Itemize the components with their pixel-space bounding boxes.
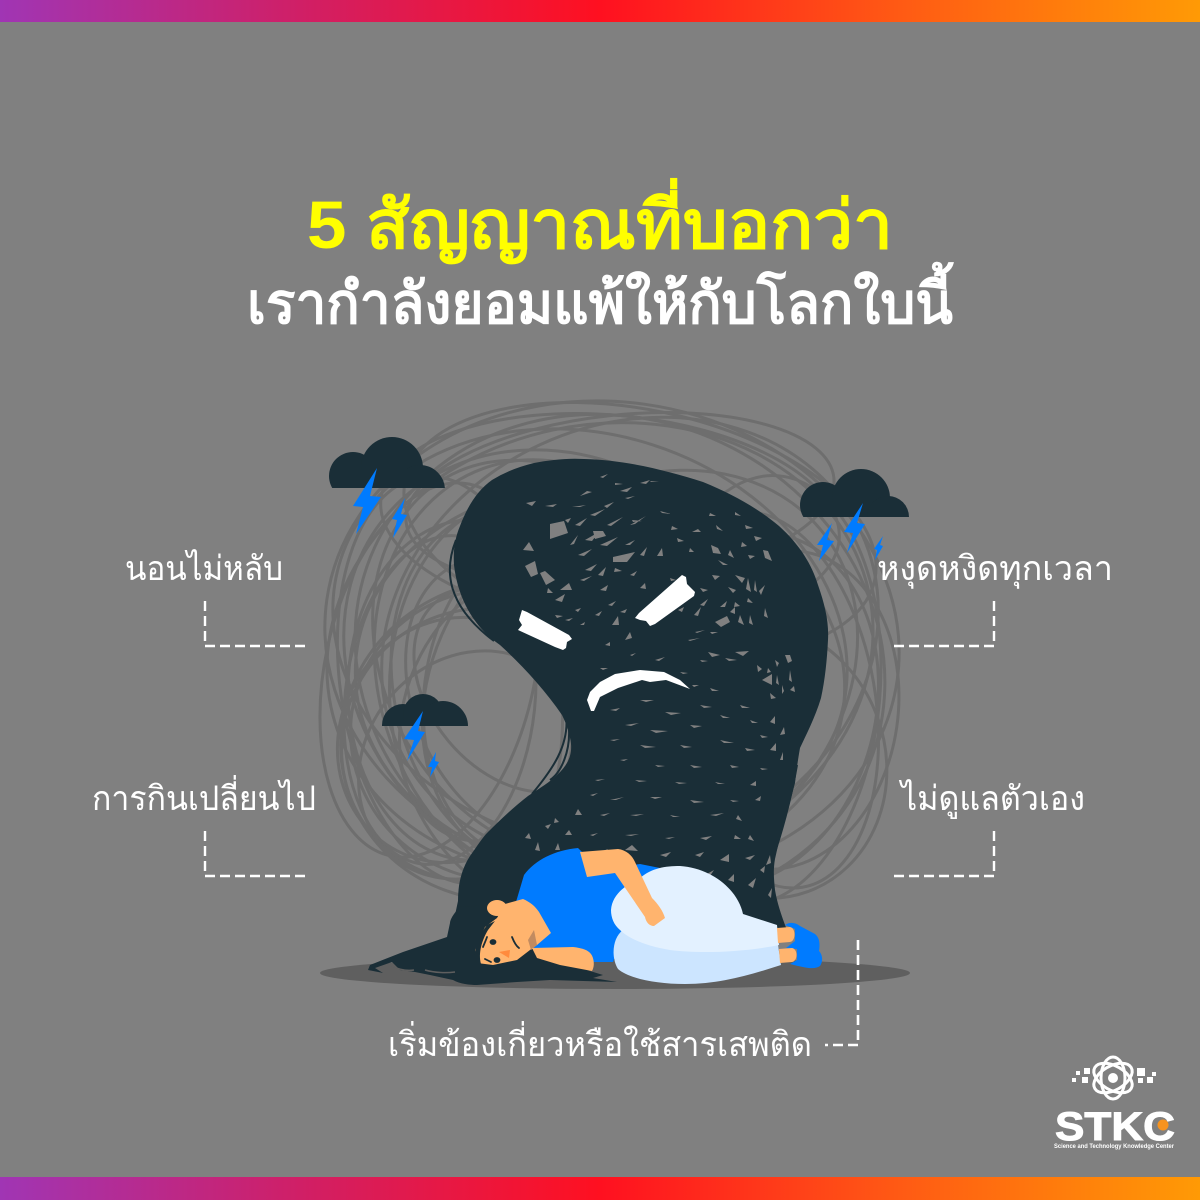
ground shadow <box>320 957 910 989</box>
facial features <box>483 937 519 962</box>
lower hair <box>368 905 617 985</box>
ankle bottom <box>779 948 796 963</box>
title line 1: 5 สัญญาณที่บอกว่า <box>307 177 893 264</box>
ankle top <box>777 927 794 943</box>
upper leg and hip <box>611 866 779 952</box>
angry eye right <box>635 575 695 626</box>
lightning bolts <box>817 503 883 561</box>
title line 2: เรากำลังยอมแพ้ให้กับโลกใบนี้ <box>247 262 955 336</box>
storm cloud left <box>329 437 445 538</box>
label: substance use <box>388 940 858 1064</box>
title <box>247 177 955 336</box>
label: irritable <box>877 550 1113 646</box>
neck shadow <box>528 930 537 950</box>
angry eye left <box>518 610 572 650</box>
lower leg and hip <box>614 930 781 984</box>
atom icon <box>1089 1057 1137 1099</box>
shirt <box>516 848 660 962</box>
hair strands <box>450 540 797 858</box>
nose <box>499 950 510 958</box>
STKC logo <box>1054 1057 1175 1150</box>
hair mass <box>450 459 828 965</box>
lightning bolts <box>353 468 407 538</box>
label: sleep <box>125 549 310 646</box>
pixel dots <box>1072 1068 1156 1083</box>
tagline: Science and Technology Knowledge Center <box>1054 1144 1175 1150</box>
scribble gaps in hair <box>505 0 795 898</box>
top gradient bar <box>0 0 1200 22</box>
label: irritable: หงุดหงิดทุกเวลา <box>877 550 1113 589</box>
frowning mouth <box>587 670 690 711</box>
storm cloud right <box>800 469 909 561</box>
bottom gradient bar <box>0 1177 1200 1200</box>
storm cloud middle <box>382 694 468 777</box>
label: self care: ไม่ดูแลตัวเอง <box>898 779 1085 819</box>
label: eating: การกินเปลี่ยนไป <box>92 775 316 818</box>
hair fringe <box>475 921 495 964</box>
head and neck <box>475 899 551 965</box>
label: eating <box>92 775 316 876</box>
label: substance use: เริ่มข้องเกี่ยวหรือใช้สารเสพติด <box>388 1021 812 1064</box>
ear <box>487 900 507 916</box>
arm over body <box>580 849 665 926</box>
label: self care <box>890 779 1085 876</box>
background scribble <box>254 328 966 992</box>
lightning bolts <box>404 711 439 777</box>
label: sleep: นอนไม่หลับ <box>125 549 283 588</box>
bottom arm <box>532 947 594 971</box>
dark hair monster with angry face <box>450 0 828 965</box>
shoes <box>785 923 822 968</box>
strand gaps <box>392 966 455 973</box>
orange dot <box>1158 1120 1168 1130</box>
woman lying down <box>368 848 822 985</box>
wordmark: STKC <box>1055 1105 1175 1149</box>
